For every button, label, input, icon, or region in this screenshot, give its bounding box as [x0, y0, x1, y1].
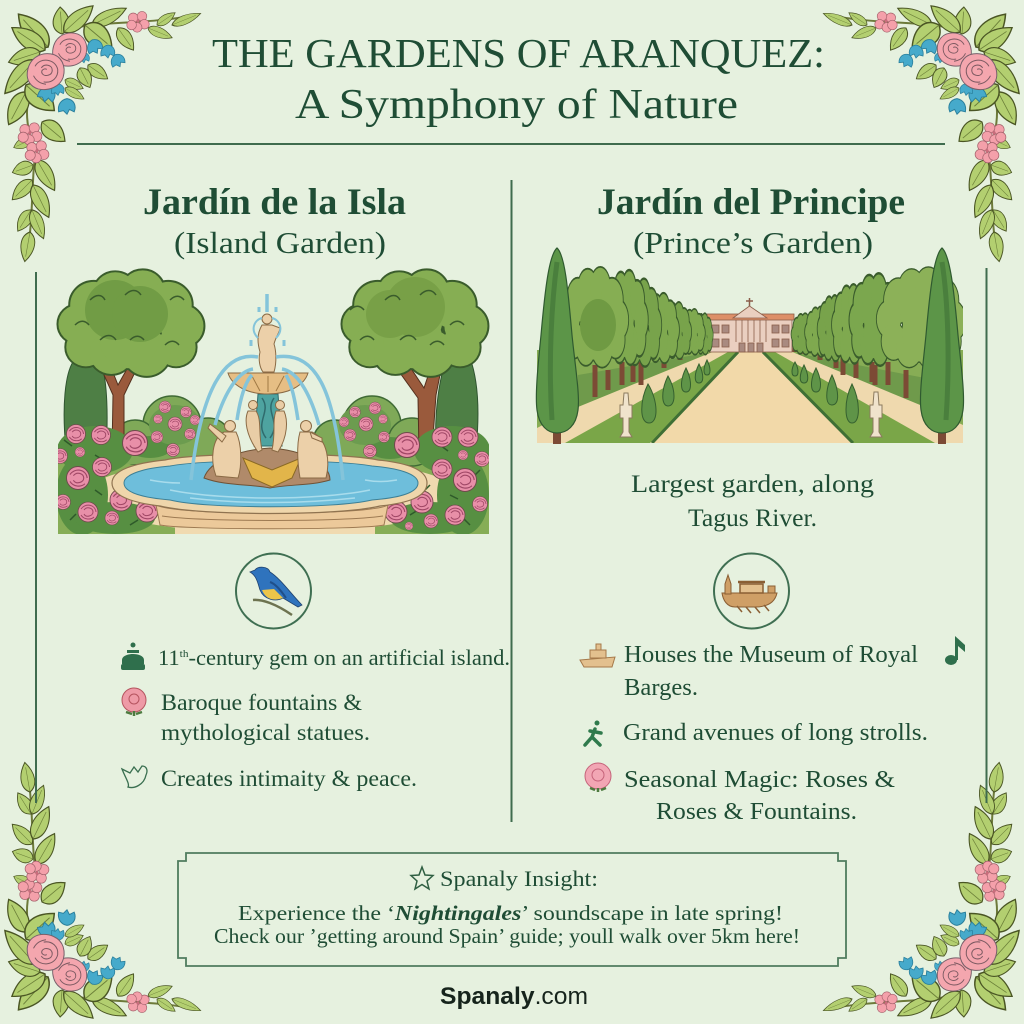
- sand path: [52, 401, 490, 535]
- right tree trunks: [795, 342, 906, 398]
- callout: Spanaly Insight: Spanaly Insight:: [440, 866, 598, 891]
- right frame line: [986, 268, 988, 803]
- item: Museum of Royal Barges: [580, 642, 918, 701]
- fountain basin steps: [156, 505, 388, 529]
- icon: rose: [122, 688, 146, 716]
- roses: [52, 401, 490, 530]
- icon: fountain: [121, 642, 145, 670]
- background hedges: [113, 396, 436, 466]
- illustration: fountain garden: [52, 270, 490, 535]
- left frame line: [35, 272, 37, 803]
- corner floral: bottom left: [0, 761, 202, 1024]
- inner lawns: [565, 352, 738, 443]
- item: Grand avenues: Grand avenues of long strolls.: [623, 720, 928, 746]
- icon: royal barge badge: [714, 554, 789, 628]
- intro text: Largest garden: Largest garden, along: [631, 471, 875, 498]
- fountain base rocks: [204, 448, 330, 488]
- left list: [121, 642, 510, 792]
- water jets: [191, 294, 343, 480]
- item: 11th century: -century gem on an artificial island.: [188, 645, 510, 670]
- footer brand: Spanaly.com: [440, 983, 588, 1010]
- column: [254, 394, 282, 446]
- callout: Spanaly Insight: Check our ’getting around Spain’ guide; youll walk over 5km here!: [214, 924, 800, 948]
- callout: Spanaly Insight: [178, 853, 846, 966]
- rose bushes: [56, 405, 490, 535]
- corner floral: top left: [0, 0, 202, 263]
- heading: Jardín de la Isla: Jardín de la Isla: [143, 182, 406, 223]
- item: Baroque fountains: Baroque fountains &: [161, 690, 362, 716]
- item: 11th century: th: [180, 648, 189, 660]
- item: Creates intimacy: Creates intimaity & peace.: [161, 766, 417, 792]
- item: Seasonal Magic: Roses & Fountains.: [656, 799, 857, 825]
- heading: Jardín del Principe: [597, 182, 905, 260]
- item: Baroque fountains: [122, 688, 370, 746]
- callout: Spanaly Insight: Experience the ‘ Nightingales ’ soundscape in late spring!: [238, 901, 783, 925]
- right list: [580, 642, 928, 825]
- side mermaids: [246, 400, 286, 452]
- upper bowl: [228, 373, 308, 394]
- heading: Jardín del Principe: Jardín del Principe: [597, 182, 905, 223]
- left cypress: [536, 248, 578, 444]
- heading: Jardín del Principe: (Prince’s Garden): [633, 225, 873, 260]
- top statue: [258, 314, 280, 372]
- item: Museum of Royal Barges: Houses the Museum of Royal: [624, 642, 918, 668]
- main avenue: [652, 352, 853, 443]
- left tree row: [562, 268, 713, 367]
- far lawn and side sand paths: [537, 350, 963, 428]
- icon: nightingale badge: [236, 554, 311, 628]
- icon: dove: [122, 766, 147, 788]
- gold shells: [243, 458, 301, 487]
- intro text: Largest garden: Tagus River.: [688, 505, 817, 532]
- icon: barge: [580, 644, 615, 667]
- icon: star: [411, 867, 433, 889]
- basin rim: [112, 454, 427, 514]
- item: Seasonal Magic: [585, 763, 895, 825]
- left tree trunks: [592, 358, 682, 397]
- header divider: [77, 143, 945, 145]
- intro text: Largest garden: [631, 471, 875, 532]
- item: Museum of Royal Barges: Barges.: [624, 675, 698, 701]
- heading: Jardín de la Isla: [143, 182, 406, 260]
- item: Baroque fountains: mythological statues.: [161, 720, 370, 746]
- icon: music note: [945, 636, 965, 665]
- center column divider: [510, 180, 512, 822]
- corner floral: bottom right: [822, 761, 1024, 1024]
- item: Seasonal Magic: Seasonal Magic: Roses &: [624, 767, 895, 793]
- rear cypresses: [64, 358, 107, 450]
- corner floral: top right: [822, 0, 1024, 263]
- icon: rose: [585, 763, 611, 792]
- tree left: [58, 270, 203, 452]
- palace: [707, 298, 794, 352]
- garden statues: [620, 392, 882, 437]
- seated figures: [208, 420, 328, 478]
- illustration: prince's garden avenue: [536, 248, 966, 444]
- right cypress: [920, 248, 964, 444]
- tree right: [342, 270, 487, 452]
- title: A Symphony of Nature: [295, 82, 738, 128]
- icon: walker: [585, 720, 601, 745]
- water: [124, 461, 418, 507]
- title: THE GARDENS OF ARANQUEZ:: [212, 30, 825, 76]
- right tree row: [791, 268, 966, 369]
- topiary cones: [642, 360, 858, 423]
- item: 11th century: 11: [158, 645, 179, 670]
- ground: [58, 452, 489, 534]
- heading: Jardín de la Isla: (Island Garden): [174, 225, 386, 260]
- title: [212, 30, 825, 128]
